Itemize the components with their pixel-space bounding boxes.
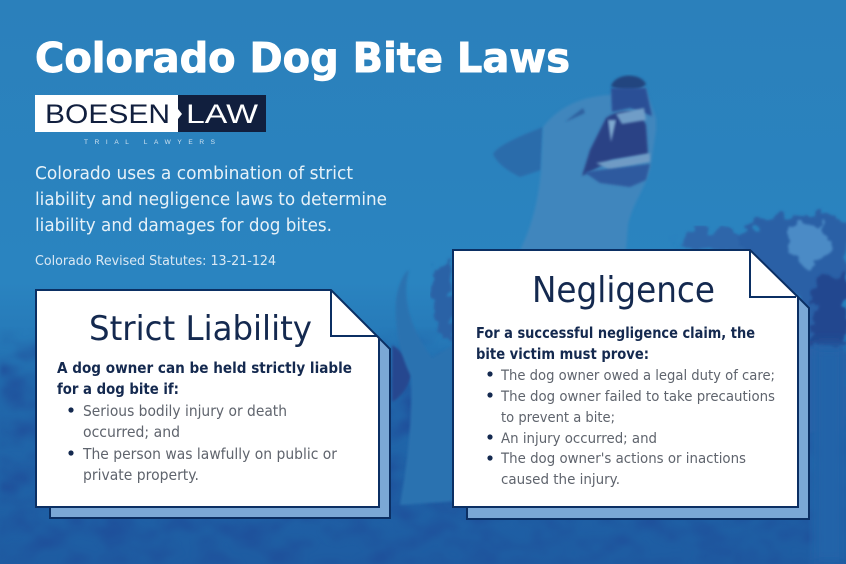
panel: negligence: [453, 250, 809, 519]
bullets: negligence: An injury occurred; and: [501, 431, 657, 447]
dog body and tail: [396, 270, 470, 505]
logo: Boesen Law: LAW: [186, 99, 259, 129]
heading: strict liability: Strict Liability: [89, 309, 312, 349]
intro: negligence: [476, 324, 755, 363]
logo: Boesen Law: BOESEN: [45, 99, 170, 129]
bullets: strict liability: private property.: [83, 466, 199, 484]
page fold: strict liability: [331, 290, 377, 336]
intro paragraph: [35, 163, 387, 236]
logo: Boesen Law: TRIAL LAWYERS: [84, 139, 216, 146]
intro: strict liability: [57, 359, 352, 398]
intro: negligence: bite victim must prove:: [476, 345, 649, 363]
statute citation: Colorado Revised Statutes: 13-21-124: [35, 253, 276, 269]
intro paragraph: liability and negligence laws to determine: [35, 189, 387, 210]
tree behind tail: [432, 258, 452, 335]
bullets: negligence: to prevent a bite;: [501, 410, 615, 426]
title: Colorado Dog Bite Laws: [35, 34, 570, 82]
bullets: negligence: The dog owner owed a legal duty of care;: [500, 368, 775, 384]
bullets: negligence: The dog owner failed to take precautions: [500, 389, 775, 405]
bullets: strict liability: [68, 402, 338, 484]
intro: strict liability: A dog owner can be held strictly liable: [57, 359, 352, 377]
bullets: strict liability: The person was lawfully on public or: [82, 445, 338, 463]
dog head: [493, 76, 656, 250]
card shadow: strict liability: [50, 338, 390, 518]
bullets: negligence: caused the injury.: [501, 472, 620, 488]
logo: Boesen Law: [35, 95, 266, 146]
foliage: right trees: [675, 215, 846, 564]
card: negligence: [453, 250, 798, 507]
panel: strict liability: [36, 290, 390, 518]
bullets: negligence: [487, 368, 775, 488]
bullets: strict liability: occurred; and: [83, 423, 180, 441]
dark foliage near tail: [392, 345, 411, 402]
page fold: negligence: [750, 250, 796, 297]
intro paragraph: liability and damages for dog bites.: [35, 215, 332, 236]
bullets: negligence: The dog owner's actions or inactions: [500, 451, 746, 467]
intro: strict liability: for a dog bite if:: [57, 380, 179, 398]
card shadow: negligence: [467, 297, 809, 519]
heading: negligence: Negligence: [532, 270, 715, 311]
intro: negligence: For a successful negligence claim, the: [476, 324, 755, 342]
card: strict liability: [36, 290, 379, 507]
bullets: strict liability: Serious bodily injury or death: [83, 402, 287, 420]
intro paragraph: Colorado uses a combination of strict: [35, 163, 353, 184]
